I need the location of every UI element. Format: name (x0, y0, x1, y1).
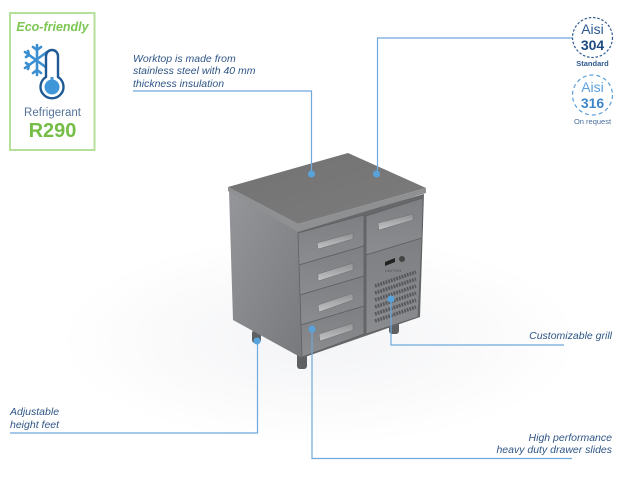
callout text: worktop: Worktop is made from (133, 53, 236, 65)
worktop surface (228, 153, 426, 224)
handles (317, 214, 413, 341)
badge: Aisi 316 on request: On request (574, 117, 612, 126)
display slot (385, 258, 395, 266)
drawer fronts (298, 198, 423, 357)
badge: Aisi 304 standard: Standard (576, 59, 609, 68)
heading: eco-friendly: Eco-friendly (16, 20, 90, 34)
badge: Aisi 316 on request (572, 75, 612, 126)
grill vents (375, 272, 416, 321)
callout: adjustable feet: height feet (10, 419, 60, 431)
panel: eco-friendly refrigerant badge (10, 13, 94, 150)
badge: Aisi 304 standard: Aisi (581, 21, 604, 37)
callout: adjustable feet (9, 338, 260, 433)
callout: adjustable feet: Adjustable (9, 406, 59, 418)
callout: worktop: stainless steel with 40 mm (133, 65, 256, 77)
product: refrigerated counter (228, 153, 426, 369)
callout: customizable grill: Customizable grill (529, 330, 613, 342)
body front (298, 194, 424, 358)
floor shadow (60, 235, 580, 445)
badge: Aisi 316 on request: Aisi (581, 79, 604, 95)
product: refrigerated counter: DAYTON (385, 268, 401, 273)
callout: worktop: thickness insulation (133, 78, 224, 90)
side panel (229, 191, 302, 358)
callout: drawer slides (308, 326, 613, 458)
callout: drawer slides: High performance (529, 432, 612, 444)
callout: material leader line (373, 38, 572, 178)
callout: worktop (133, 53, 315, 178)
worktop edge (228, 187, 426, 232)
badge: Aisi 304 standard (572, 18, 612, 68)
callout: drawer slides: heavy duty drawer slides (496, 444, 613, 456)
badge: Aisi 316 on request: 316 (581, 95, 604, 111)
feet (252, 322, 399, 369)
icon: snowflake and thermometer (25, 45, 64, 98)
badge: Aisi 304 standard: 304 (581, 37, 604, 53)
label: refrigerant: Refrigerant (24, 107, 82, 119)
callout: customizable grill (388, 296, 613, 345)
label: R290: R290 (29, 120, 76, 142)
